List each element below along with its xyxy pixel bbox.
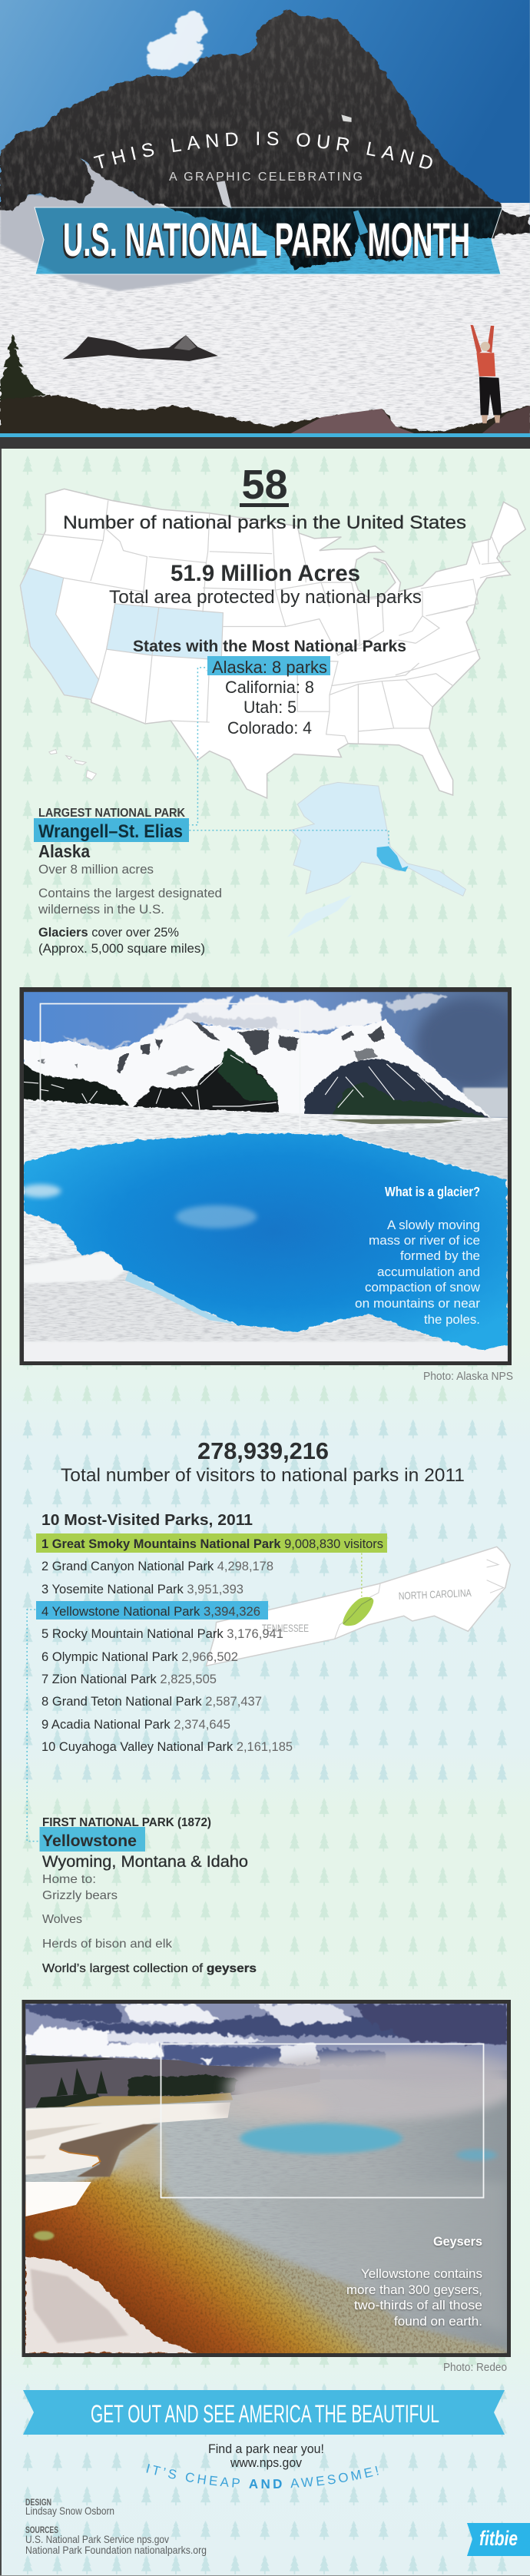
map: Alaska	[290, 782, 465, 896]
highlight bar: Yellowstone	[36, 1601, 268, 1620]
caption: visitors: Total number of visitors to national parks in 2011	[61, 1465, 465, 1486]
number: 58	[241, 462, 287, 508]
snow streaks	[23, 1055, 443, 1110]
water	[25, 2080, 507, 2353]
logo text: fitbie	[479, 2527, 518, 2550]
credits: Lindsay Snow Osborn	[25, 2505, 114, 2517]
map: Wrangell-St. Elias park	[377, 846, 409, 872]
map: highlighted states	[20, 568, 223, 699]
state: Alaska	[38, 841, 90, 861]
ranked list: 2 Grand Canyon National Park 4,298,178	[41, 1559, 273, 1573]
callout text: accumulation and	[377, 1265, 480, 1279]
white mineral shores	[25, 2256, 196, 2353]
highlight bar: Alaska	[207, 656, 330, 675]
details: (Approx. 5,000 square miles)	[38, 942, 205, 956]
design credit: DESIGN	[25, 2498, 51, 2508]
details: Contains the largest designated	[38, 887, 222, 900]
callout text	[355, 1218, 481, 1327]
storm clouds	[25, 2004, 507, 2070]
callout text: two-thirds of all those	[354, 2298, 482, 2312]
details: Over 8 million acres	[38, 863, 154, 877]
ranked list: 9 Acadia National Park 2,374,645	[41, 1717, 230, 1732]
map: contiguous states	[20, 489, 525, 798]
ranked list: 1 Great Smoky Mountains National Park 9,008,830 visitors	[41, 1537, 383, 1551]
map: Hawaii	[49, 750, 96, 780]
callout text: more than 300 geysers,	[346, 2283, 482, 2297]
url: www.nps.gov	[230, 2455, 302, 2470]
glacier rocks	[62, 335, 218, 361]
callout text: A slowly moving	[387, 1218, 480, 1232]
callout: what is a glacier	[355, 1184, 481, 1327]
details: wilderness in the U.S.	[38, 903, 164, 917]
callout text	[346, 2266, 482, 2329]
photo frame	[22, 2000, 511, 2357]
person with raised arms	[470, 325, 502, 423]
label: LARGEST NATIONAL PARK	[38, 807, 185, 820]
heading: most visited: 10 Most-Visited Parks, 2011	[41, 1511, 253, 1529]
list: states: Utah: 5	[243, 698, 296, 717]
caption: total area: Total area protected by national parks	[109, 587, 422, 608]
caption: number of parks: Number of national parks in the United States	[63, 512, 466, 533]
ranked list: 6 Olympic National Park 2,966,502	[41, 1649, 238, 1664]
banner ribbon	[35, 207, 502, 274]
credits	[25, 2498, 207, 2556]
photo panel: geysers	[10, 2000, 517, 2374]
ranked list: 7 Zion National Park 2,825,505	[41, 1672, 217, 1686]
callout text: the poles.	[424, 1312, 480, 1327]
underline	[240, 503, 289, 507]
callout text: Yellowstone contains	[361, 2266, 482, 2281]
credits: National Park Foundation nationalparks.org	[25, 2544, 207, 2556]
ranked list: 4 Yellowstone National Park 3,394,326	[41, 1604, 260, 1619]
text block: first national park	[40, 1816, 257, 1975]
details: Wolves	[42, 1913, 82, 1926]
callout heading: Geysers	[433, 2234, 482, 2249]
text block: largest national park	[34, 807, 222, 956]
call to action ribbon	[23, 2390, 505, 2435]
details	[38, 863, 222, 956]
hero photo: mountain and glacier	[0, 0, 530, 435]
park name: Yellowstone	[42, 1832, 137, 1850]
leader line yellowstone	[27, 1610, 39, 1842]
snow peaks	[23, 1019, 493, 1123]
details: Grizzly bears	[42, 1889, 118, 1902]
photo credit: Photo: Redeo	[443, 2362, 507, 2374]
list: states: Colorado: 4	[227, 718, 312, 738]
panel: national parks stats	[20, 462, 525, 937]
photo panel: glacier	[20, 987, 524, 1383]
credits: U.S. National Park Service nps.gov	[25, 2533, 169, 2545]
highlight bar	[34, 818, 189, 842]
find a park	[208, 2442, 324, 2470]
panel: visitors	[27, 1437, 510, 1842]
list: states: California: 8	[225, 678, 314, 697]
subtitle: A GRAPHIC CELEBRATING	[169, 171, 363, 184]
park name: Wrangell–St. Elias	[38, 821, 183, 842]
logo tag	[467, 2523, 530, 2556]
ranked list: 3 Yosemite National Park 3,951,393	[41, 1582, 243, 1596]
mountain dark rock	[23, 1020, 493, 1120]
details: Herds of bison and elk	[42, 1938, 173, 1951]
label: North Carolina: NORTH CAROLINA	[398, 1587, 472, 1602]
white inset rectangle	[40, 1003, 300, 1132]
ranked list: 10 Cuyahoga Valley National Park 2,161,185	[41, 1739, 293, 1754]
highlight bar: Smoky	[36, 1533, 387, 1553]
state shapes	[206, 1547, 510, 1666]
curved heading: THIS LAND IS OUR LAND	[94, 131, 432, 169]
mud edge	[59, 2124, 159, 2177]
ranked list	[41, 1537, 383, 1754]
tree pattern: blue visitors	[15, 1409, 515, 1785]
details: Glaciers cover over 25%	[38, 926, 179, 940]
white beach	[25, 2103, 230, 2175]
list: states: Alaska: 8 parks	[212, 658, 327, 677]
glacier photo	[20, 992, 524, 1361]
states: Wyoming, Montana & Idaho	[42, 1853, 248, 1871]
fitbie logo	[467, 2523, 530, 2556]
details: Home to:	[42, 1873, 96, 1886]
title banner	[35, 207, 502, 274]
white inset rectangle	[161, 2044, 484, 2197]
callout text: compaction of snow	[365, 1280, 481, 1295]
steam	[227, 2054, 517, 2120]
ranked list: 5 Rocky Mountain National Park 3,176,941	[41, 1626, 283, 1641]
far hillside and trees	[25, 2055, 320, 2108]
stat: 58	[240, 462, 289, 508]
curved slogan: IT’S CHEAP AND AWESOME!	[146, 2464, 379, 2488]
label: FIRST NATIONAL PARK (1872)	[42, 1816, 211, 1829]
mineral band	[10, 2161, 507, 2366]
fir tree	[0, 333, 48, 399]
stat: visitors: 278,939,216	[197, 1437, 329, 1464]
tree pattern: mint top	[15, 449, 515, 1409]
callout text: mass or river of ice	[369, 1233, 480, 1248]
list: states	[212, 658, 327, 738]
details	[42, 1873, 257, 1975]
tree pattern: blue footer	[15, 2385, 515, 2576]
state map: Tennessee and North Carolina	[27, 1547, 510, 1842]
foreground ground	[0, 396, 530, 435]
find a park text: Find a park near you!	[208, 2442, 324, 2456]
highlight bar	[40, 1827, 145, 1852]
dotted leader lines	[189, 668, 389, 846]
US map	[20, 489, 525, 937]
callout text: on mountains or near	[355, 1296, 480, 1311]
sources: SOURCES	[25, 2526, 58, 2535]
heading: states list: States with the Most National Parks	[133, 638, 406, 655]
photo credit: Photo: Alaska NPS	[423, 1371, 513, 1383]
callout text: formed by the	[400, 1248, 480, 1263]
leader line	[361, 1553, 363, 1596]
callout text: found on earth.	[394, 2314, 482, 2329]
Great Smoky park area	[343, 1597, 373, 1626]
tree pattern: mint yellowstone	[15, 1785, 515, 2385]
lake	[24, 1133, 508, 1351]
ribbon shape	[23, 2390, 505, 2435]
callout heading: What is a glacier?	[385, 1184, 480, 1199]
ranked list: 8 Grand Teton National Park 2,587,437	[41, 1694, 262, 1709]
photo frame	[20, 987, 512, 1365]
geyser photo	[10, 2004, 517, 2366]
label: Tennessee: TENNESSEE	[262, 1623, 309, 1634]
callout: geysers	[346, 2234, 482, 2329]
details: World’s largest collection of geysers	[42, 1962, 257, 1975]
stat: 51.9 million acres: 51.9 Million Acres	[171, 561, 360, 586]
